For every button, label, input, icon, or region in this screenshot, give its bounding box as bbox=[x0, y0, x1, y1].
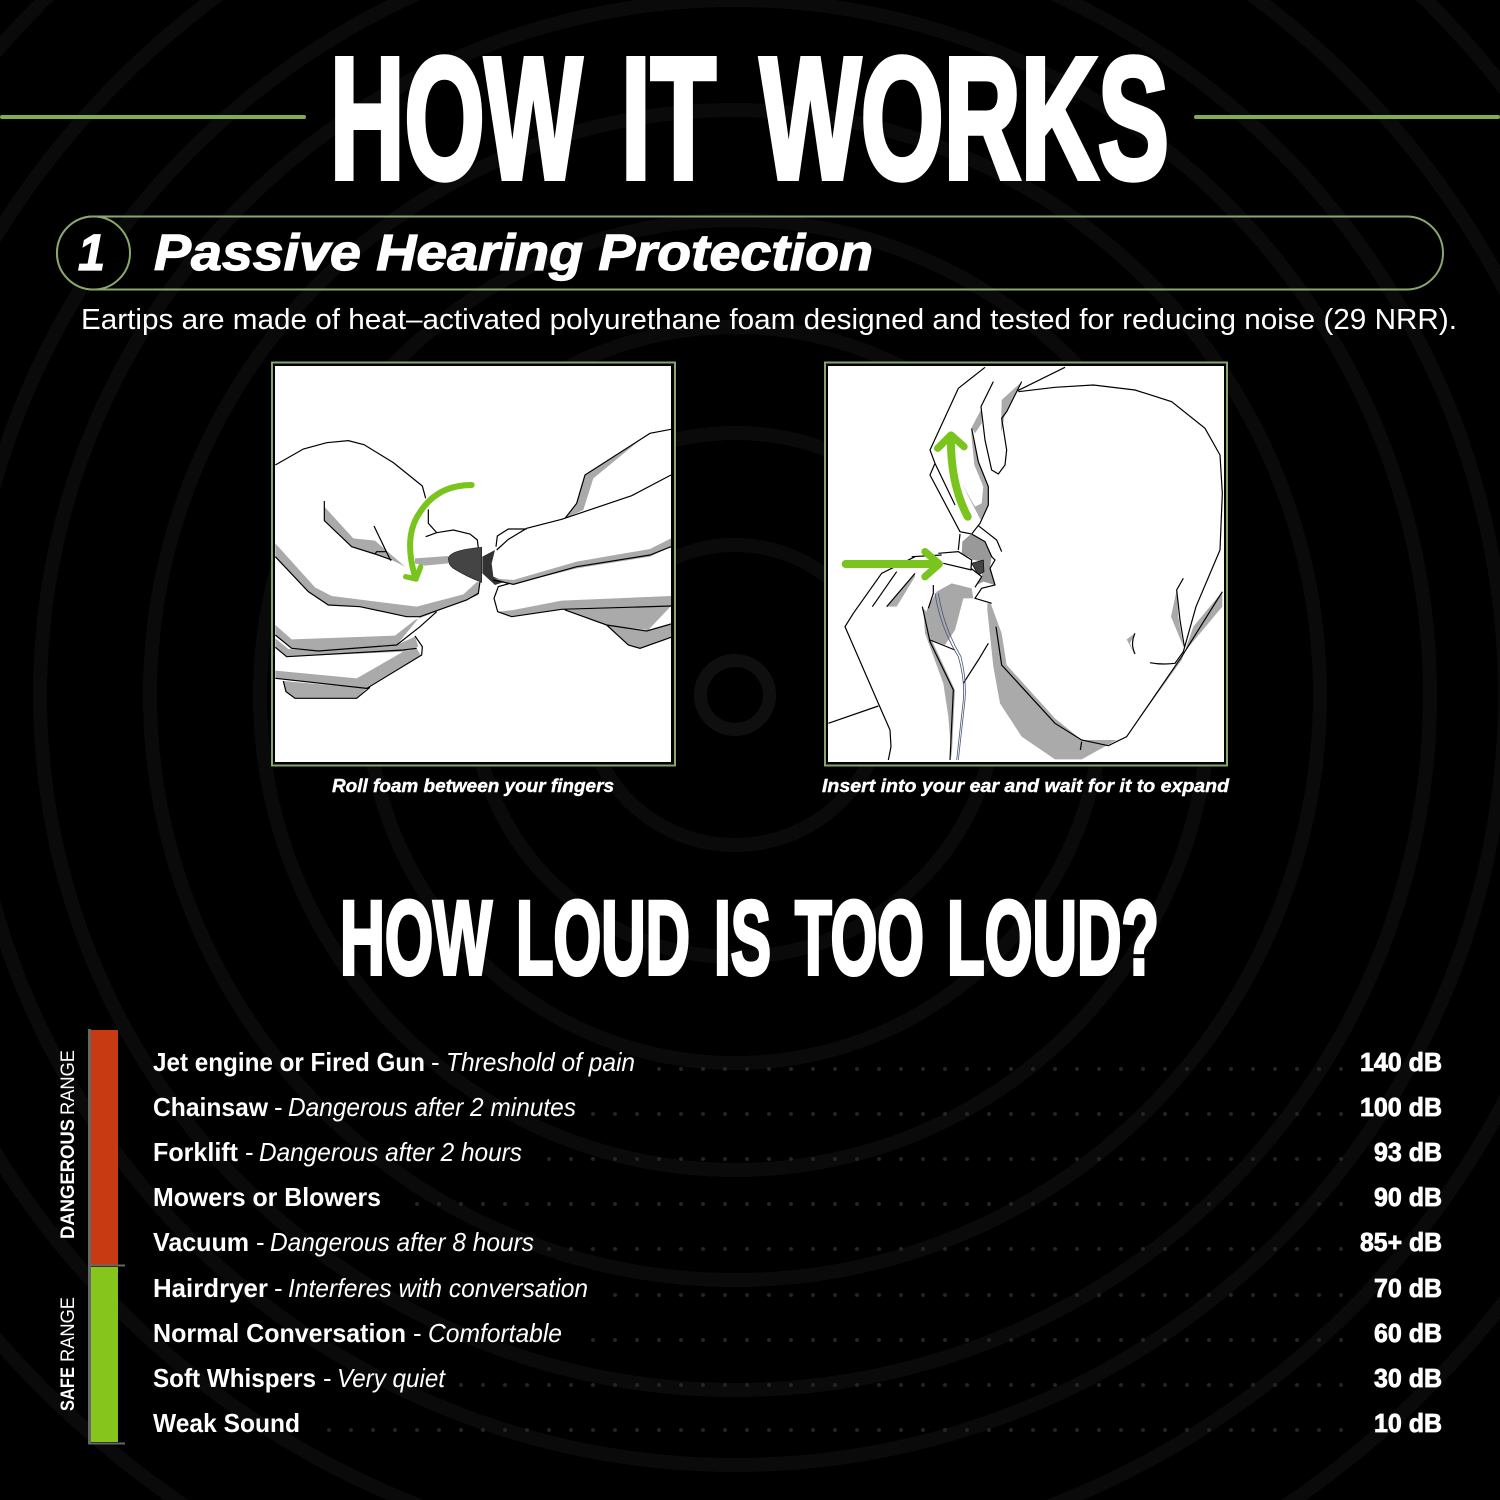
row: hairdryer bbox=[153, 1273, 1442, 1303]
heading: how loud is too loud: LOUD? bbox=[947, 880, 1159, 997]
row: soft whispers bbox=[153, 1363, 1442, 1393]
row: chainsaw: - bbox=[274, 1092, 283, 1122]
row: jet engine bbox=[153, 1047, 1442, 1077]
row: hairdryer: 70 dB bbox=[1374, 1273, 1442, 1303]
row: jet engine: - bbox=[431, 1047, 440, 1077]
heading: how loud is too loud: IS bbox=[714, 880, 771, 997]
upper hand bbox=[930, 367, 1065, 534]
row: hairdryer: Hairdryer bbox=[153, 1273, 268, 1303]
earplug tip bbox=[448, 547, 505, 585]
row: normal conversation: Normal Conversation bbox=[153, 1318, 406, 1348]
row: soft whispers: Soft Whispers bbox=[153, 1363, 316, 1393]
title: How It Works bbox=[330, 21, 1169, 215]
heading: how loud is too loud: LOUD bbox=[516, 880, 690, 997]
section header: passive hearing protection: 1 bbox=[78, 224, 105, 281]
arrow: insert bbox=[846, 552, 939, 577]
row: vacuum: Vacuum bbox=[153, 1227, 249, 1257]
row: forklift: - bbox=[245, 1137, 254, 1167]
row: chainsaw: 100 dB bbox=[1360, 1092, 1442, 1122]
title rule left bbox=[0, 115, 306, 119]
label: safe range bbox=[58, 1297, 79, 1411]
title rule right bbox=[1194, 115, 1500, 119]
arrow: roll bbox=[406, 485, 472, 579]
title: How It Works: WORKS bbox=[760, 21, 1169, 215]
row: weak sound bbox=[153, 1408, 1442, 1438]
row: vacuum: 85+ dB bbox=[1360, 1227, 1442, 1257]
section header: passive hearing protection bbox=[57, 216, 1443, 290]
row: mowers: 90 dB bbox=[1374, 1182, 1442, 1212]
left hand bbox=[275, 441, 480, 698]
panel: rolling foam illustration bbox=[272, 362, 675, 766]
row: vacuum: Dangerous after 8 hours bbox=[270, 1227, 534, 1257]
row: forklift: Dangerous after 2 hours bbox=[259, 1137, 522, 1167]
caption: roll foam: Roll foam between your fingers bbox=[332, 776, 614, 796]
row: hairdryer: Interferes with conversation bbox=[288, 1273, 588, 1303]
row: normal conversation: 60 dB bbox=[1374, 1318, 1442, 1348]
label: dangerous range bbox=[58, 1050, 79, 1239]
head and jaw bbox=[987, 385, 1222, 759]
right hand bbox=[493, 429, 671, 648]
title: How It Works: IT bbox=[621, 21, 716, 215]
row: mowers bbox=[153, 1182, 1442, 1212]
row: normal conversation: Comfortable bbox=[428, 1318, 562, 1348]
ear and earplug bbox=[912, 526, 1002, 603]
row: normal conversation bbox=[153, 1318, 1442, 1348]
description text: Eartips are made of heat–activated polyurethane foam designed and tested for reducing noise (29 NRR). bbox=[81, 304, 1457, 336]
section header: passive hearing protection: Passive Hearing Protection bbox=[154, 224, 873, 281]
heading: how loud is too loud bbox=[340, 880, 1159, 997]
caption: insert: Insert into your ear and wait for it to expand bbox=[822, 776, 1230, 796]
row: weak sound: 10 dB bbox=[1374, 1408, 1442, 1438]
panel: inserting earplug illustration bbox=[825, 362, 1227, 766]
row: jet engine: Threshold of pain bbox=[446, 1047, 635, 1077]
row: normal conversation: - bbox=[413, 1318, 422, 1348]
lower hand and neck bbox=[828, 557, 988, 760]
range scale bar bbox=[88, 1029, 125, 1444]
label: dangerous range: RANGE bbox=[58, 1050, 79, 1115]
row: forklift: 93 dB bbox=[1374, 1137, 1442, 1167]
row: vacuum bbox=[153, 1227, 1442, 1257]
row: soft whispers: - bbox=[323, 1363, 332, 1393]
label: dangerous range: DANGEROUS bbox=[58, 1119, 79, 1239]
row: vacuum: - bbox=[256, 1227, 265, 1257]
row: forklift bbox=[153, 1137, 1442, 1167]
row: hairdryer: - bbox=[274, 1273, 283, 1303]
row: forklift: Forklift bbox=[153, 1137, 238, 1167]
heading: how loud is too loud: TOO bbox=[795, 880, 924, 997]
arrow: pull ear up bbox=[938, 435, 968, 517]
row: soft whispers: 30 dB bbox=[1374, 1363, 1442, 1393]
row: weak sound: Weak Sound bbox=[153, 1408, 300, 1438]
row: chainsaw bbox=[153, 1092, 1442, 1122]
noise level list bbox=[153, 1047, 1442, 1438]
title: How It Works: HOW bbox=[330, 21, 582, 215]
row: chainsaw: Dangerous after 2 minutes bbox=[288, 1092, 576, 1122]
heading: how loud is too loud: HOW bbox=[340, 880, 492, 997]
row: chainsaw: Chainsaw bbox=[153, 1092, 269, 1122]
label: safe range: RANGE bbox=[58, 1297, 79, 1362]
row: mowers: Mowers or Blowers bbox=[153, 1182, 381, 1212]
row: jet engine: 140 dB bbox=[1360, 1047, 1442, 1077]
label: safe range: SAFE bbox=[58, 1367, 79, 1411]
row: soft whispers: Very quiet bbox=[337, 1363, 447, 1393]
row: jet engine: Jet engine or Fired Gun bbox=[153, 1047, 425, 1077]
